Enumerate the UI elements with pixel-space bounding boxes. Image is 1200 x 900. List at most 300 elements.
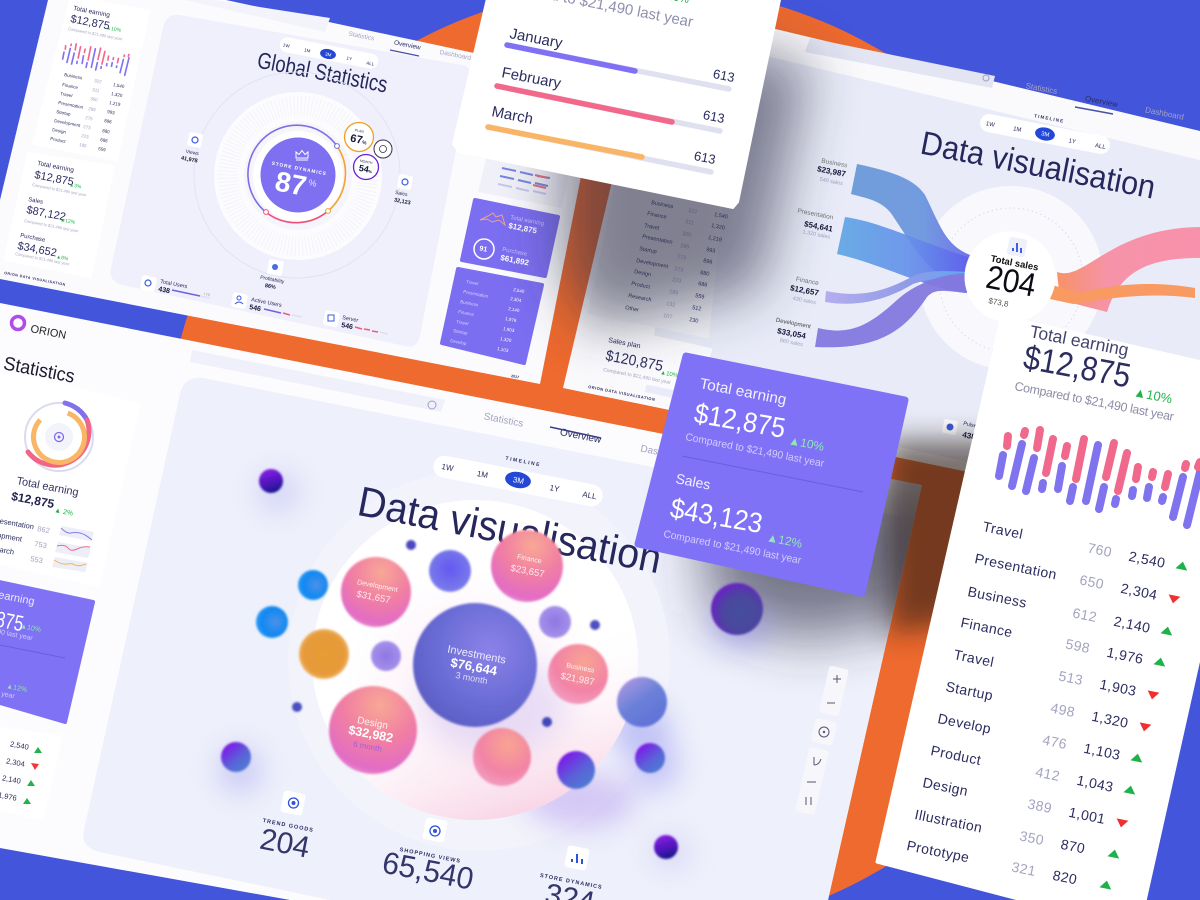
tabs: Statistics <box>483 411 524 430</box>
timeline pill: ALL <box>582 490 598 501</box>
table rows: 1,320 <box>1090 708 1130 731</box>
table rows: Business <box>966 583 1028 611</box>
sales plan card <box>592 327 710 392</box>
left card: earning, sales, purchase: ▲8% <box>56 254 69 262</box>
table rows: 476 <box>1041 731 1069 752</box>
list card: 686 <box>698 281 708 289</box>
top tabs <box>348 31 472 62</box>
left card: total earning list: 223 <box>81 133 90 140</box>
february row <box>497 64 726 131</box>
sankey labels: 430 sales <box>792 296 817 306</box>
table rows: Presentation <box>973 550 1058 582</box>
tabs <box>483 411 690 464</box>
table rows: 820 <box>1051 867 1079 887</box>
timeline pill: 1M <box>476 469 489 480</box>
pulse stat <box>942 419 977 442</box>
left card: total earning list: $12,875 <box>69 13 111 33</box>
purple card: table: 2,540 <box>513 287 525 294</box>
bubble: design: 6 month <box>352 739 383 754</box>
stat: profitability <box>260 259 285 291</box>
left card: total earning list: 273 <box>83 124 92 131</box>
stat: sales: Sales <box>394 190 408 198</box>
purple card: table: 1,903 <box>503 326 515 333</box>
footer label: ORION DATA VISUALISATION <box>4 271 66 287</box>
left card: earning, sales, purchase: Purchase <box>20 233 46 244</box>
timeline pill: 1Y <box>549 483 561 494</box>
list card: 512 <box>692 305 702 313</box>
top tabs <box>1025 81 1185 122</box>
white list card (left): 2,540 <box>9 739 30 752</box>
table rows: Product <box>929 742 983 768</box>
timeline pill: 1W <box>985 121 996 129</box>
list card: Research <box>628 293 652 303</box>
table rows: 870 <box>1059 836 1087 856</box>
card: purple total earning and sales: $12,875 <box>692 397 788 444</box>
top tabs: Statistics <box>1025 81 1058 96</box>
table rows: Finance <box>959 614 1014 640</box>
white list card (left) <box>0 728 60 818</box>
timeline pill: ALL <box>366 60 375 67</box>
bubble: design: $32,982 <box>347 723 394 745</box>
left card: total earning list: 322 <box>94 78 103 85</box>
list card: 185 <box>669 289 679 297</box>
left card: total earning list: ▲10% <box>106 25 122 34</box>
top tabs: Statistics <box>348 31 375 43</box>
sankey labels: $33,054 <box>776 326 807 341</box>
timeline pill: 1M <box>304 47 311 54</box>
store dynamics gauge: STORE DYNAMICS <box>271 161 327 177</box>
table rows: 1,103 <box>1082 740 1122 763</box>
list card: Startup <box>639 246 657 255</box>
month badge: 54% <box>358 163 374 175</box>
sankey labels: Business <box>821 158 849 170</box>
left card: earning, sales, purchase: $87,122 <box>25 204 67 224</box>
left card: total earning list: 1,320 <box>111 91 123 98</box>
bubble: business: $21,987 <box>560 671 595 688</box>
left card: earning, sales, purchase: Compared to $21,490 last year <box>32 182 87 198</box>
zoom controls <box>795 665 849 815</box>
donut card: $12,875 <box>10 489 56 511</box>
list card: 273 <box>674 266 684 274</box>
total sales circle: Total sales <box>990 254 1039 274</box>
left card: earning, sales, purchase: Total earning <box>37 160 75 174</box>
left card: total earning list: Business <box>64 72 83 81</box>
table rows: Prototype <box>905 837 971 866</box>
stat: total users: 438 <box>158 286 171 295</box>
timeline pill: 3M <box>325 51 332 58</box>
left card: total earning list: 311 <box>92 87 100 93</box>
title: Data visualisation: Data visualisation <box>918 124 1159 206</box>
purple card (left) <box>0 580 93 722</box>
left card: earning, sales, purchase: Compared to $21,490 last year <box>15 251 70 267</box>
left card: total earning list: 880 <box>102 128 111 135</box>
donut card: 862 <box>37 524 51 535</box>
stat: trend goods: 204 <box>257 823 313 865</box>
pulse stat: Pulse <box>963 421 977 430</box>
bubble: development: $31,657 <box>356 589 391 606</box>
left card: total earning list: Finance <box>62 82 79 90</box>
icon: search <box>428 401 436 409</box>
plan badge: 67% <box>349 133 368 148</box>
pulse stat: 438 <box>962 430 977 442</box>
left card: total earning list: Travel <box>60 91 73 98</box>
purple card: table: 2,304 <box>510 296 522 303</box>
stat: sales <box>393 174 413 207</box>
stat: active users: Active Users <box>251 297 282 309</box>
purple card: total earning and purchase: Purchase <box>502 247 528 258</box>
table rows: 2,304 <box>1119 580 1159 603</box>
stat: store dynamics: STORE DYNAMICS <box>539 873 603 891</box>
plan badge: PLAN <box>354 128 365 134</box>
month badge: MONTH <box>360 159 373 165</box>
purple card: table <box>442 269 542 363</box>
table rows: 598 <box>1064 635 1092 656</box>
search bar <box>176 0 330 32</box>
stat: server: Server <box>342 315 359 324</box>
purple card: table: Presentation <box>463 289 489 299</box>
bubble: finance: Finance <box>516 554 542 565</box>
sankey labels: 1,320 sales <box>802 229 831 241</box>
left card: total earning list: 993 <box>107 109 116 116</box>
left card: total earning list: 275 <box>85 115 94 122</box>
table rows: 1,043 <box>1075 772 1115 795</box>
table rows: 1,976 <box>1105 644 1145 667</box>
purple card: table: 1,103 <box>497 346 509 353</box>
bubble: design: Design <box>356 715 389 732</box>
icon: search <box>983 75 989 81</box>
purple card: total earning and purchase: $61,892 <box>500 253 530 268</box>
left card: total earning list: Total earning <box>73 5 111 19</box>
timeline pill: TIMELINE <box>1034 113 1065 124</box>
tabs: Overview <box>559 427 603 446</box>
left card: earning, sales, purchase: ▲12% <box>60 217 76 226</box>
bubble: investments: 3 month <box>455 670 488 686</box>
sphere on shadow <box>711 583 763 635</box>
list card: Product <box>631 281 651 291</box>
card: total earning table: $12,875 <box>1021 339 1134 396</box>
top tabs: Dashboard <box>1144 105 1185 122</box>
stat: profitability: Profitability <box>260 275 285 285</box>
purple card: table: Startup <box>453 328 468 336</box>
faint outer ring <box>194 72 400 278</box>
march row <box>488 103 717 172</box>
search bar <box>805 38 995 88</box>
timeline pill: 3M <box>1041 131 1050 139</box>
card: total earning table <box>877 316 1200 900</box>
timeline pill: 1W <box>282 42 291 49</box>
stat: shopping views: 65,540 <box>380 845 476 897</box>
store dynamics gauge: % <box>308 177 317 189</box>
stat: server <box>323 310 388 334</box>
left card: total earning list <box>34 0 148 159</box>
white blob <box>312 500 638 820</box>
glow blobs <box>218 472 770 868</box>
list card: 289 <box>680 243 690 251</box>
left card: total earning list: 300 <box>90 96 99 103</box>
stat: sales: 32,123 <box>393 197 411 207</box>
purple card: total earning and purchase: 91 <box>479 245 488 254</box>
timeline pill: 1M <box>1013 126 1022 134</box>
timeline pill: TIMELINE <box>505 456 542 468</box>
stat: total users: Total Users <box>160 279 188 290</box>
table rows <box>905 518 1189 895</box>
card: total earning table: Total earning <box>1028 321 1130 360</box>
list card: Business <box>651 200 674 210</box>
search bar <box>190 350 445 412</box>
sales plan card: Compared to $21,490 last year <box>603 367 671 386</box>
left card: total earning list: 686 <box>100 137 109 144</box>
sankey labels: Finance <box>795 276 820 287</box>
left card: earning, sales, purchase <box>6 154 113 276</box>
february row: February <box>500 64 563 92</box>
list card: 107 <box>663 313 673 321</box>
table rows: 1,903 <box>1098 676 1138 699</box>
left card: earning, sales, purchase: $34,652 <box>16 240 58 260</box>
table rows: 350 <box>1018 827 1046 848</box>
purple card: total earning and purchase: $12,875 <box>508 221 538 236</box>
bubble: investments: $76,644 <box>449 655 499 679</box>
timeline pill <box>978 113 1112 155</box>
table rows: 1,001 <box>1067 804 1107 827</box>
timeline pill <box>278 36 380 70</box>
footer label: ORION DATA VISUALISATION <box>588 384 656 402</box>
stat: total users <box>140 275 211 298</box>
february row: 613 <box>702 107 726 126</box>
top tabs: Overview <box>1084 94 1119 109</box>
card: total earning table: ▲10% <box>1132 384 1174 406</box>
card: purple total earning and sales: ▲10% <box>787 433 826 454</box>
left card: earning, sales, purchase: ▲3% <box>69 182 82 190</box>
sankey labels: 540 sales <box>819 177 844 187</box>
card: monthly progress <box>453 0 782 208</box>
list card: 1,219 <box>708 235 722 244</box>
donut card: Total earning <box>16 475 80 499</box>
left card: total earning list: 185 <box>79 142 88 149</box>
card: purple total earning and sales: Compared to $21,490 last year <box>662 528 803 567</box>
purple card: table: 2,140 <box>508 306 520 313</box>
card: total earning table: Compared to $21,490 last year <box>1013 379 1175 424</box>
stat: store dynamics <box>539 845 603 900</box>
panel: global statistics dashboard <box>0 0 600 384</box>
bubble: investments: Investments <box>446 644 507 667</box>
purple card: table: 1,976 <box>505 316 517 323</box>
stat: trend goods: TREND GOODS <box>262 818 314 834</box>
year label: 2017 <box>511 374 519 380</box>
sankey ribbons <box>815 164 1200 347</box>
month badge <box>354 154 378 180</box>
card: purple total earning and sales <box>638 356 905 593</box>
logo: ORION <box>29 323 67 342</box>
card: purple total earning and sales: Sales <box>674 470 712 493</box>
panel: data visualisation sankey dashboard <box>563 0 1200 500</box>
shadow of january card <box>560 30 810 330</box>
smile badge <box>374 140 392 158</box>
table rows: Design <box>921 774 970 799</box>
title: Global Statistics: Global Statistics <box>255 47 390 98</box>
card: purple total earning and sales: ▲12% <box>765 530 804 551</box>
table rows: Travel <box>952 646 996 670</box>
card: purple total earning and sales: Total earning <box>698 375 788 409</box>
outer faint ring <box>288 469 670 851</box>
purple card: total earning and purchase <box>462 200 558 276</box>
table rows: Travel <box>981 518 1025 542</box>
table rows: 389 <box>1026 795 1054 816</box>
bubble: finance <box>491 530 563 602</box>
background: orange circle <box>165 0 1115 900</box>
sankey labels: $23,987 <box>816 164 847 179</box>
stat: trend goods <box>257 790 314 865</box>
list card: Development <box>636 258 669 270</box>
shadow of right card on orange <box>885 440 1005 635</box>
list card: 322 <box>688 208 698 216</box>
left card: total earning list: Product <box>50 136 67 144</box>
tabs: Dashboard <box>639 443 690 464</box>
left card: total earning list: 896 <box>104 118 113 125</box>
sales plan card: ▲10% <box>660 370 679 380</box>
table rows: Illustration <box>913 806 984 836</box>
timeline pill: 1Y <box>346 56 352 62</box>
sales plan card: $120,875 <box>604 347 664 375</box>
left card: earning, sales, purchase: $12,875 <box>33 169 75 189</box>
stat: total users: +76 <box>203 291 211 297</box>
purple card: table: Business <box>460 299 479 308</box>
stat: views: Views <box>185 149 200 157</box>
march row: March <box>490 103 534 128</box>
stat: views <box>180 132 203 165</box>
logo <box>12 316 67 342</box>
purple card: table: 1,320 <box>500 336 512 343</box>
timeline pill: 1Y <box>1068 138 1076 146</box>
january row <box>507 25 736 89</box>
right shadow gradient <box>700 480 940 640</box>
purple card: table: Develop <box>450 338 467 346</box>
stat: active users <box>231 292 302 317</box>
table rows: 498 <box>1049 699 1077 720</box>
total sales circle: 204 <box>983 258 1039 304</box>
left card: total earning list: Presentation <box>58 100 84 110</box>
sankey labels: Presentation <box>797 208 834 222</box>
purple card (left): ▲10% <box>20 623 42 634</box>
sankey labels: Development <box>775 318 811 330</box>
table rows: 2,540 <box>1127 548 1167 571</box>
total sales circle <box>964 232 1056 322</box>
dotted ring <box>939 208 1083 352</box>
sankey labels <box>775 158 849 348</box>
bubble: investments <box>413 603 537 727</box>
stat: views: 41,978 <box>180 155 198 165</box>
list card: Finance <box>647 211 667 221</box>
left card: total earning list: 1,219 <box>109 100 121 107</box>
donut card: 553 <box>30 554 44 565</box>
table rows: 612 <box>1071 604 1099 625</box>
table mini card <box>478 150 570 208</box>
left card: total earning list: 289 <box>88 106 97 113</box>
left card: earning, sales, purchase: Compared to $21,490 last year <box>24 218 79 234</box>
donut card: ▲ 2% <box>54 507 74 518</box>
list card: Other <box>625 305 639 314</box>
panel: bubble dashboard <box>0 303 1000 900</box>
stat: shopping views <box>380 817 476 897</box>
purple card: table: Finance <box>458 309 475 317</box>
white list card (left): 2,304 <box>5 756 26 769</box>
list card: 223 <box>672 277 682 285</box>
store dynamics gauge: 87 <box>273 165 309 202</box>
table rows: 2,140 <box>1112 613 1152 636</box>
table rows: Develop <box>936 710 993 737</box>
list card: 1,540 <box>714 212 728 221</box>
store dynamics gauge <box>214 92 382 260</box>
decorative spheres <box>221 469 678 859</box>
stat: active users: 546 <box>249 304 262 313</box>
left card: earning, sales, purchase: Sales <box>28 197 44 206</box>
white list card (left): 2,140 <box>1 773 22 786</box>
stat: profitability: 86% <box>264 283 276 291</box>
january row: January <box>508 25 564 52</box>
table rows: 321 <box>1010 858 1038 879</box>
list card: 880 <box>700 270 710 278</box>
donut chart <box>25 403 93 471</box>
icon: chart <box>1006 236 1028 258</box>
list card: 993 <box>706 247 716 255</box>
bubble: business: Business <box>566 662 595 675</box>
purple card: total earning and purchase: Total earning <box>510 215 544 228</box>
sankey labels: $54,641 <box>803 219 834 234</box>
card: purple total earning and sales: Compared to $21,490 last year <box>684 431 826 470</box>
table rows: Startup <box>944 678 995 703</box>
left card: total earning list: 559 <box>98 146 107 153</box>
timeline pill: 1W <box>441 462 455 473</box>
list card: 1,320 <box>711 223 725 232</box>
left card: total earning list: Startup <box>56 109 71 117</box>
top tabs: Dashboard <box>439 49 472 62</box>
sales plan card: Sales plan <box>608 337 641 350</box>
bubble: design <box>329 686 417 774</box>
donut card <box>0 368 138 585</box>
march row: 613 <box>693 148 717 167</box>
purple card: table: Travel <box>466 279 479 286</box>
table rows: 412 <box>1034 763 1062 784</box>
left card: total earning list: Compared to $21,490 last year <box>68 26 123 42</box>
bubble: development <box>341 557 411 627</box>
january row: 613 <box>712 66 736 85</box>
table rows: 513 <box>1057 667 1085 688</box>
title: Data visualisation: Data visualisation <box>354 477 665 582</box>
panel: inner lavender area <box>110 15 470 347</box>
inner lavender area <box>83 378 1000 900</box>
left card: total earning list: Development <box>54 118 82 128</box>
sparklines <box>52 526 94 572</box>
list card: 311 <box>685 219 694 227</box>
purple card: table: Travel <box>456 319 469 326</box>
timeline pill: 3M <box>512 475 525 486</box>
list card: 300 <box>682 231 692 239</box>
bar chart <box>999 430 1200 525</box>
purple card (left): ▲12% <box>6 683 28 694</box>
top tabs: Overview <box>393 40 422 52</box>
bubble: business <box>548 644 608 704</box>
list card: Design <box>634 269 652 278</box>
plan badge <box>344 122 374 152</box>
sankey labels: 860 sales <box>779 338 804 348</box>
list card: 230 <box>689 317 699 325</box>
heading: statistics: Statistics <box>2 353 76 388</box>
donut card: 753 <box>34 539 48 550</box>
left card: total earning list: 1,540 <box>113 82 125 89</box>
table rows: 760 <box>1086 539 1114 560</box>
list card: 275 <box>677 254 687 262</box>
big white circle <box>919 186 1103 370</box>
list card: 896 <box>703 258 713 266</box>
